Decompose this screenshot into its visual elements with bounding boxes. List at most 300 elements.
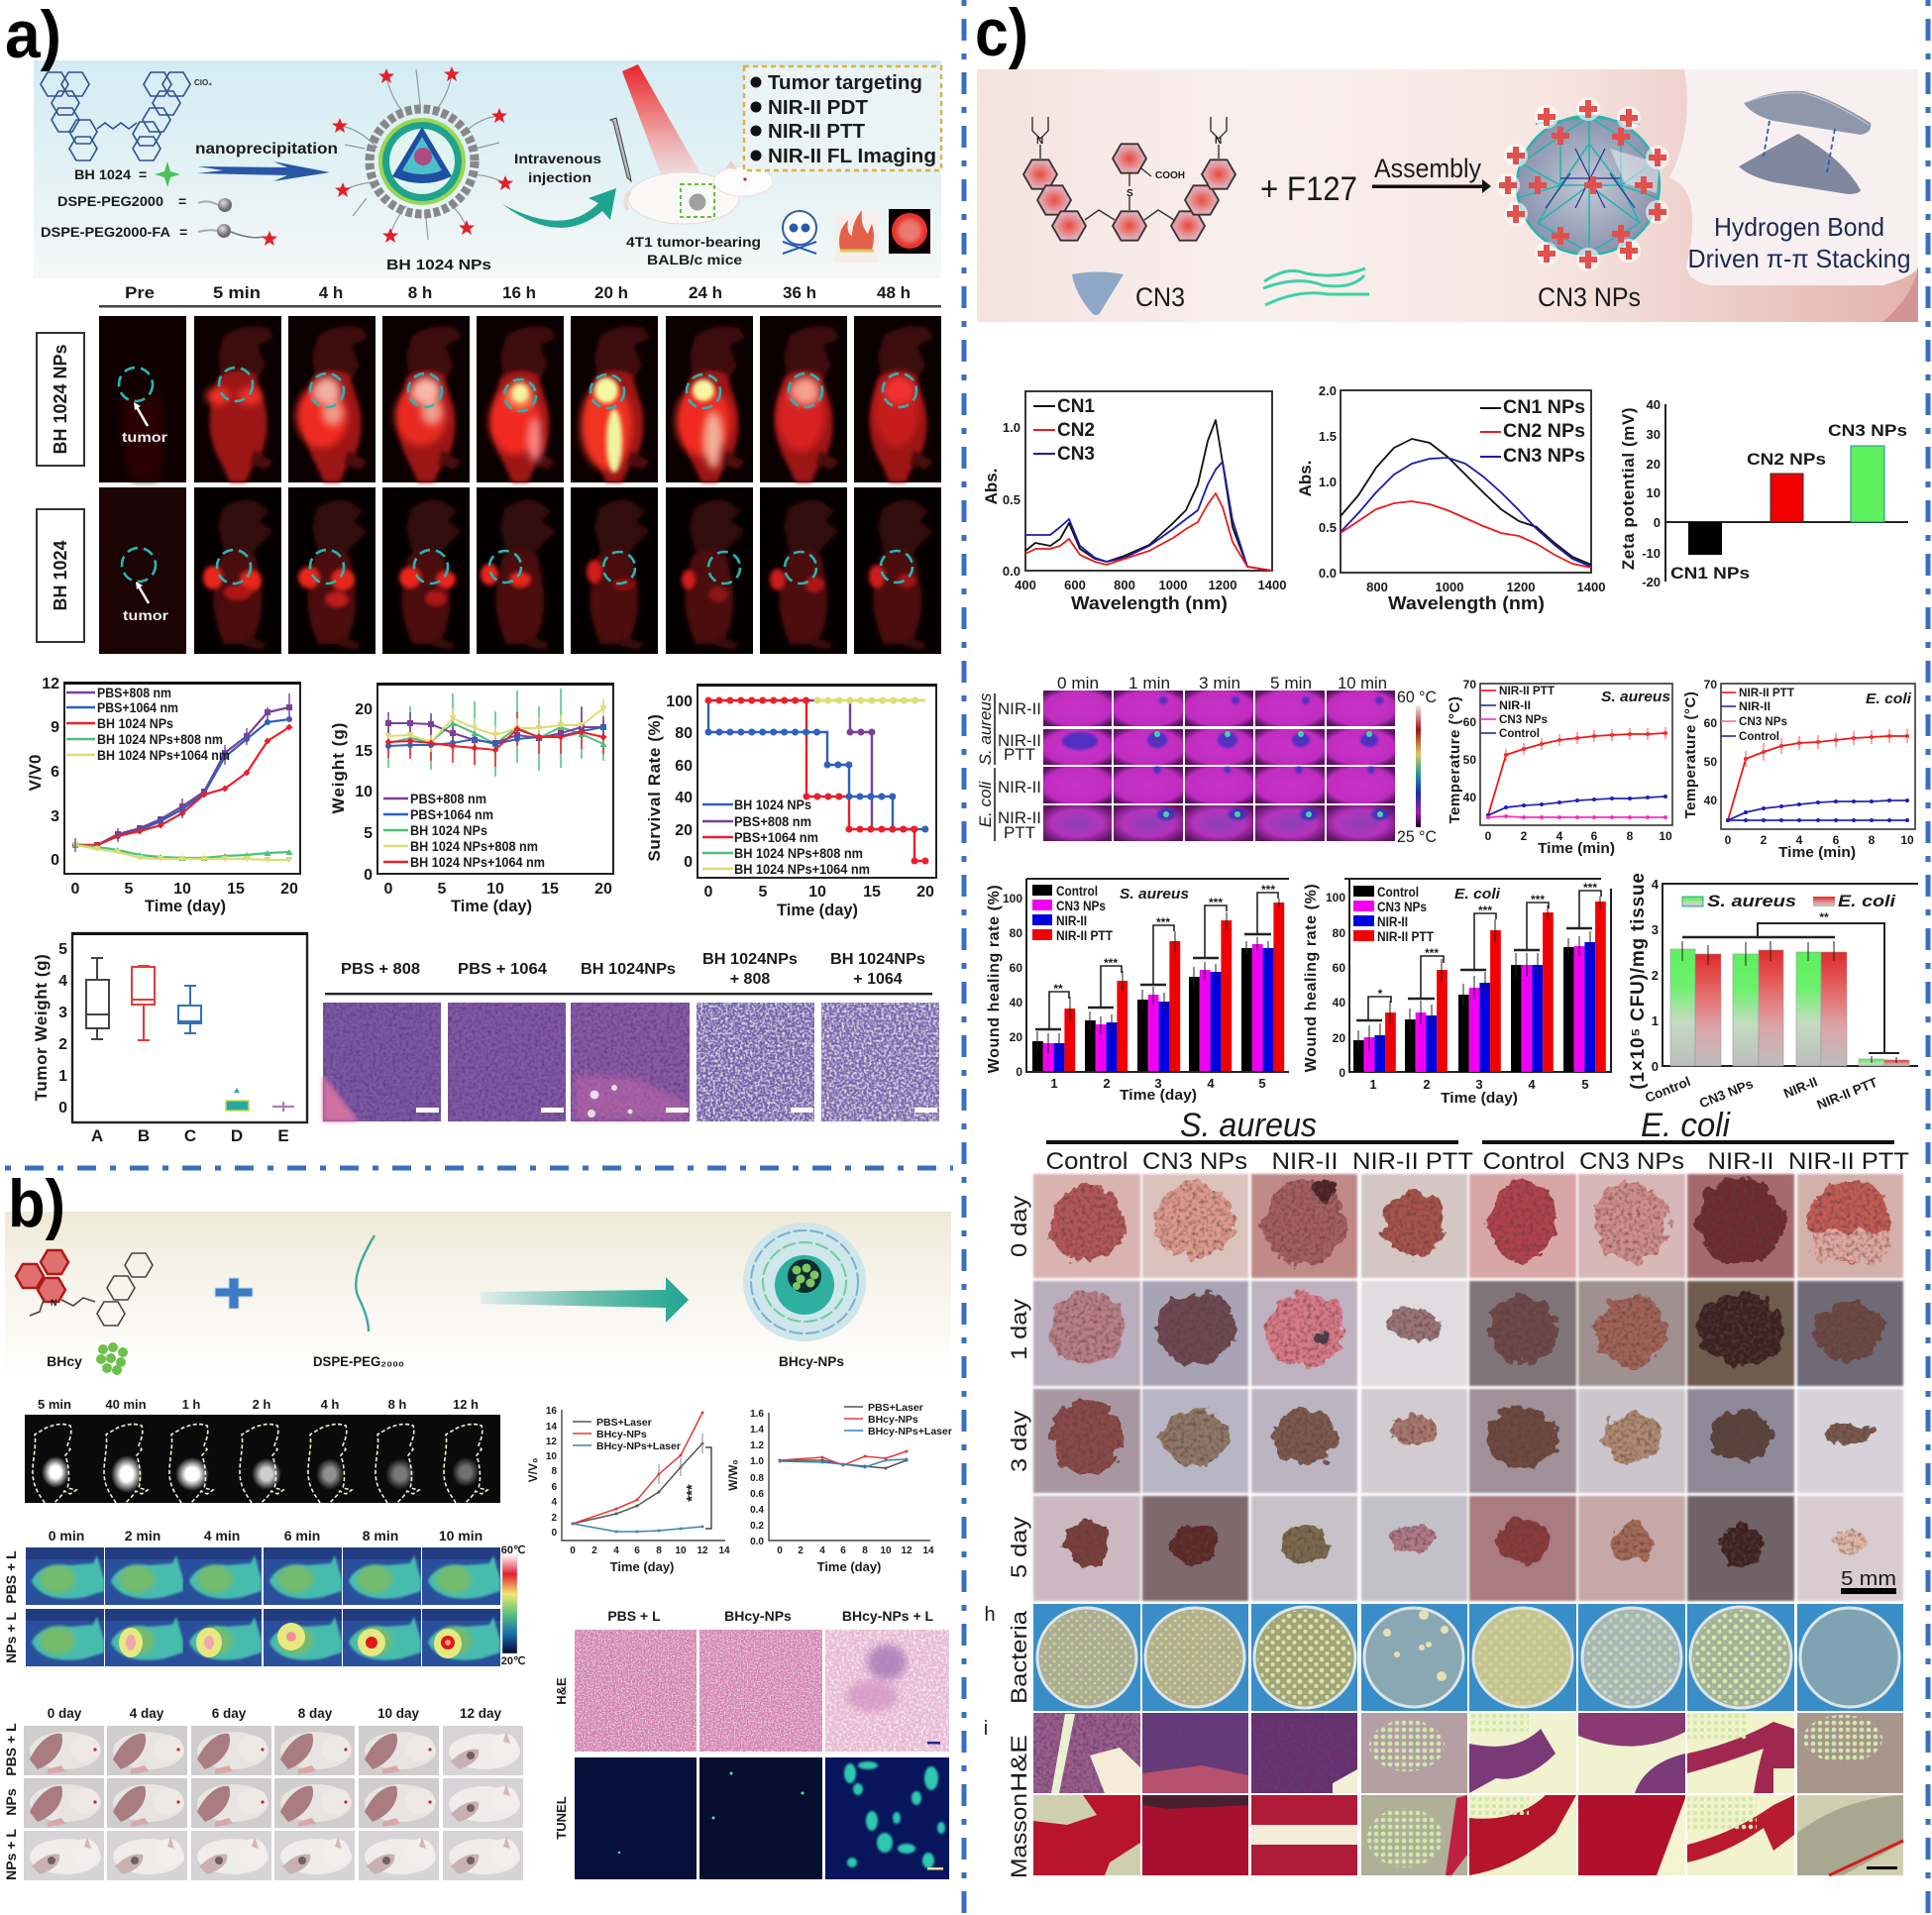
chart: wound healing S. aureus: *** — [1104, 956, 1118, 970]
legend: BH 1024 NPs — [410, 823, 487, 838]
chart: survival rate: 40 — [675, 790, 693, 806]
chart: wound healing S. aureus: *** — [1209, 896, 1223, 909]
chart: tumor weight box plot: 1 — [58, 1068, 67, 1085]
headers: wound photograph grid: CN3 NPs — [1142, 1148, 1247, 1175]
chart: survival rate: 80 — [675, 725, 693, 742]
chart: temperature S. aureus: 6 — [1591, 829, 1598, 843]
image: mouse photographs: 10 day — [377, 1706, 420, 1721]
legend: CN3 — [1057, 444, 1095, 465]
chart: absorbance CN NPs: Wavelength (nm) — [1388, 593, 1545, 613]
chart: temperature E. coli: 6 — [1833, 833, 1840, 847]
annotation: tumor arrow: tumor — [123, 607, 169, 623]
chart: temperature E. coli: 40 — [1704, 794, 1717, 807]
image: mouse photographs: NPs + L — [3, 1829, 19, 1880]
image: wound thermal imaging: 10 min — [1338, 674, 1387, 692]
legend: NIR-II — [1056, 913, 1087, 928]
image: mouse photographs: 6 day — [212, 1706, 247, 1721]
icon: laser beam — [622, 64, 705, 182]
image: H&E and TUNEL panel b — [554, 1608, 949, 1879]
chart: zeta potential: 20 — [1647, 457, 1661, 472]
icon: skull — [783, 211, 816, 254]
chart: V/V0 panel b: V/V₀ — [526, 1458, 540, 1482]
chart: bacterial burden: (1×10⁵ CFU)/mg tissue — [1628, 872, 1649, 1090]
callout: functions box — [744, 66, 941, 170]
labels: banner b — [47, 1353, 844, 1369]
image: thermal imaging: PBS + L — [3, 1550, 19, 1604]
chart: wound healing E. coli: Wound healing rate (%) — [1303, 884, 1320, 1072]
legend: components — [41, 161, 277, 246]
arrow: assembly — [481, 1277, 689, 1323]
chart: tumor weight box plot: 3 — [58, 1005, 67, 1021]
chart: W/W0 panel b: 1.6 — [750, 1409, 764, 1420]
molecule: CN3 — [1023, 144, 1235, 241]
chart: tumor weight box plot: B — [138, 1126, 150, 1145]
headers: wound photograph grid — [1046, 1107, 1909, 1175]
chart: absorbance CN1-3: Abs. — [982, 469, 1001, 504]
labels: thermal rows: NIR-II — [998, 731, 1041, 750]
chart: zeta potential: 10 — [1647, 485, 1661, 500]
chart: survival rate: Time (day) — [777, 901, 858, 919]
histology labels: panel a: PBS + 808 — [341, 961, 420, 978]
molecule: BH 1024 — [41, 72, 212, 160]
heading: b): b) — [8, 1166, 65, 1241]
legend: E. coli — [1838, 892, 1896, 910]
chart: wound healing S. aureus: Time (day) — [1120, 1087, 1197, 1104]
image: wound thermal imaging: 1 min — [1128, 674, 1170, 692]
banner: BH 1024 nanoparticle synthesis — [34, 60, 941, 278]
labels: banner b: BHcy-NPs — [779, 1353, 844, 1369]
chart: wound healing E. coli: * — [1378, 987, 1383, 1001]
label: Assembly: Assembly — [1374, 154, 1481, 183]
chart: absorbance CN1-3: 1200 — [1209, 578, 1236, 592]
legend: BHcy-NPs — [868, 1414, 918, 1426]
banner: BHcy nanoparticle synthesis — [5, 1212, 951, 1376]
labels: thermal rows: PTT — [1004, 823, 1035, 842]
legend: components: = — [139, 166, 147, 182]
chart: bacterial burden: 3 — [1652, 922, 1659, 937]
chart: wound healing S. aureus: 4 — [1207, 1076, 1215, 1091]
chart: body weight: 0 — [384, 881, 393, 898]
icon: CN3 nanoparticle — [1496, 97, 1669, 271]
headers: wound photograph grid: NIR-II PTT — [1352, 1148, 1473, 1175]
annotation: significance bracket — [1682, 910, 1899, 1053]
image: thermal imaging: 4 min — [204, 1528, 240, 1543]
chart: absorbance CN NPs: 800 — [1366, 580, 1388, 594]
chart: temperature E. coli: 60 — [1704, 716, 1717, 730]
chart: temperature S. aureus: 8 — [1627, 829, 1634, 843]
time-point labels: 8 h — [408, 283, 432, 302]
chart: W/W0 panel b: 2 — [798, 1545, 804, 1556]
chart: V/V0 tumor growth: 3 — [51, 808, 59, 825]
chart: W/W0 panel b: 10 — [880, 1545, 892, 1556]
chart: absorbance CN NPs: 0.5 — [1319, 520, 1337, 535]
histology labels: panel a: BH 1024NPs — [702, 951, 798, 968]
chart: absorbance CN NPs: 1.0 — [1319, 475, 1337, 489]
image grid: wound photographs day 1 — [1033, 1281, 1903, 1386]
time-point labels: 24 h — [689, 283, 722, 302]
callout: functions box: NIR-II PDT — [768, 97, 868, 119]
chart: survival rate: 20 — [916, 884, 934, 901]
label: BH 1024 row — [37, 509, 84, 642]
image: NIR-II fluorescence time series: 40 min — [105, 1397, 147, 1412]
legend: PBS+Laser — [596, 1417, 652, 1429]
legend: components: DSPE-PEG2000-FA — [41, 224, 170, 240]
legend — [573, 1417, 681, 1452]
chart: survival rate: 15 — [863, 884, 881, 901]
image grid: Masson staining — [1033, 1795, 1903, 1875]
chart: wound healing S. aureus: 2 — [1103, 1076, 1111, 1091]
labels: thermal rows: E. coli — [976, 781, 995, 827]
time-point labels: 20 h — [594, 283, 628, 302]
headers: wound photograph grid: NIR-II PTT — [1788, 1148, 1909, 1175]
image: wound thermal imaging — [976, 674, 1437, 846]
image: thermal imaging: 10 min — [439, 1528, 483, 1543]
labels: banner b: DSPE-PEG₂₀₀₀ — [313, 1353, 404, 1369]
icon: stacked triangles — [1739, 91, 1871, 194]
legend: NIR-II — [1739, 701, 1771, 713]
icon: DSPE-PEG chain — [356, 1235, 375, 1331]
chart: survival rate: 0 — [684, 854, 693, 871]
legend: NIR-II — [1499, 700, 1531, 712]
time-point labels: 5 min — [213, 283, 261, 302]
chart: temperature S. aureus: 60 — [1463, 715, 1476, 729]
label: stacking mechanism: Hydrogen Bond — [1714, 212, 1884, 242]
legend — [1480, 397, 1585, 467]
chart: temperature S. aureus: Temperature (°C) — [1447, 696, 1463, 823]
image: NIR-II fluorescence time series: 4 h — [321, 1397, 339, 1412]
chart: wound healing S. aureus: *** — [1261, 883, 1275, 897]
chart: zeta potential — [1619, 397, 1908, 589]
chart: temperature S. aureus: 2 — [1521, 829, 1528, 843]
arrow: assembly — [1372, 179, 1491, 193]
labels: thermal rows — [976, 692, 1041, 842]
row labels: wound photograph grid: H&E — [1007, 1735, 1031, 1792]
labels: thermal rows: NIR-II — [998, 808, 1041, 827]
chart: V/V0 panel b: 14 — [718, 1545, 730, 1556]
icon: BH 1024 nanoparticle — [332, 66, 513, 243]
label: mice: 4T1 tumor-bearing — [626, 234, 761, 250]
labels: thermal rows: PTT — [1004, 745, 1035, 764]
histology labels: panel a: + 808 — [730, 971, 770, 988]
legend: thermal colorbar: 60℃ — [501, 1544, 525, 1556]
label: intravenous injection — [514, 151, 601, 185]
chart: bacterial burden — [1628, 872, 1918, 1113]
chart: body weight — [329, 683, 613, 915]
legend: PBS+808 nm — [410, 792, 486, 806]
label: intravenous injection: injection — [528, 169, 591, 185]
chart: temperature S. aureus: 50 — [1463, 753, 1476, 767]
chart: absorbance CN1-3: 1000 — [1159, 578, 1187, 592]
label: + F127: + F127 — [1260, 170, 1357, 208]
label: mice: BALB/c mice — [647, 252, 742, 267]
scale bar — [1867, 1866, 1897, 1869]
chart: W/W0 panel b: 1.4 — [750, 1425, 764, 1436]
legend: components: BH 1024 — [74, 166, 131, 182]
chart: body weight: 15 — [541, 881, 559, 898]
legend: thermal colorbar: 60 °C — [1397, 688, 1437, 706]
chart: wound healing E. coli: 1 — [1369, 1077, 1377, 1092]
chart: wound healing S. aureus: 1 — [1050, 1076, 1058, 1091]
legend: Control — [1377, 885, 1419, 900]
image: thermal imaging: 8 min — [363, 1528, 398, 1543]
icon: red fluorescence spot — [889, 209, 930, 254]
label: stacking mechanism: Driven π-π Stacking — [1688, 244, 1910, 273]
chart: tumor weight box plot: 5 — [58, 941, 67, 958]
chart: body weight: 20 — [594, 881, 612, 898]
chart: temperature E. coli: Temperature (°C) — [1682, 692, 1699, 818]
chart: tumor weight box plot: C — [184, 1126, 196, 1145]
legend: CN2 NPs — [1503, 421, 1585, 442]
chart: bacterial burden: Control — [1643, 1074, 1692, 1106]
legend — [1353, 885, 1435, 944]
panel b — [3, 1166, 952, 1880]
chart: wound healing S. aureus: 0 — [1016, 1065, 1022, 1079]
annotation: tumor arrow: tumor — [122, 429, 168, 445]
chart: absorbance CN1-3: 1400 — [1258, 578, 1286, 592]
chart: temperature E. coli: 4 — [1796, 833, 1803, 847]
chart: bacterial burden: 0 — [1652, 1059, 1659, 1074]
image: mouse photographs: 12 day — [460, 1706, 502, 1721]
icon: flames — [835, 210, 879, 263]
chart: body weight: 5 — [438, 881, 447, 898]
legend: NIR-II PTT — [1056, 928, 1114, 943]
chart: temperature S. aureus — [1447, 678, 1672, 857]
chart: bacterial burden: 2 — [1652, 968, 1659, 983]
image: thermal imaging: 0 min — [49, 1528, 84, 1543]
label: CN3 NPs: CN3 NPs — [1538, 282, 1641, 312]
image: NIR-II fluorescence time series: 12 h — [453, 1397, 479, 1412]
legend: PBS+1064 nm — [97, 700, 178, 715]
legend: Control — [1739, 731, 1779, 743]
image: H&E and TUNEL panel b: H&E — [554, 1677, 569, 1705]
chart: absorbance CN1-3: 0.0 — [1003, 564, 1020, 579]
icon: syringe — [610, 118, 631, 181]
chart: W/W0 panel b: 12 — [901, 1545, 912, 1556]
chart: tumor weight box plot — [32, 932, 307, 1145]
chart: W/W0 panel b — [726, 1402, 952, 1574]
molecule: BHcy: N — [51, 1298, 57, 1308]
chart: survival rate: Survival Rate (%) — [645, 713, 664, 862]
chart: V/V0 panel b: 4 — [613, 1545, 619, 1556]
headers: wound photograph grid: NIR-II — [1272, 1148, 1338, 1175]
chart: V/V0 panel b: 16 — [546, 1406, 557, 1417]
legend: CN2 — [1057, 420, 1095, 441]
chart: survival rate — [645, 684, 936, 919]
histology labels: panel a: BH 1024NPs — [830, 951, 925, 968]
markers: tumor circles — [119, 368, 916, 411]
chart: wound healing S. aureus: 60 — [1010, 961, 1022, 975]
chart: zeta potential: 40 — [1647, 397, 1661, 412]
time-point labels: 16 h — [502, 283, 536, 302]
chart: V/V0 tumor growth: V/V0 — [26, 755, 45, 791]
legend: PBS+808 nm — [97, 686, 171, 700]
icon: dye cluster — [96, 1342, 128, 1375]
chart: tumor weight box plot: E — [277, 1126, 289, 1145]
image: mouse photographs: PBS + L — [3, 1723, 19, 1776]
annotation: significance bracket: *** — [684, 1484, 700, 1502]
legend — [1721, 688, 1794, 743]
molecule: BHcy — [16, 1250, 153, 1326]
markers: tumor circles — [122, 548, 912, 584]
image: H&E and TUNEL panel b: TUNEL — [554, 1796, 569, 1840]
headers: wound photograph grid: NIR-II — [1708, 1148, 1773, 1175]
chart: wound healing E. coli: *** — [1583, 881, 1597, 895]
chart: body weight: 5 — [364, 825, 373, 842]
chart: bacterial burden: 1 — [1652, 1013, 1659, 1028]
image row: BH 1024 fluorescence — [99, 487, 941, 654]
chart: V/V0 panel b — [526, 1406, 730, 1574]
legend: PBS+Laser — [868, 1402, 923, 1414]
chart: temperature E. coli: 10 — [1900, 833, 1914, 847]
image: NIR-II fluorescence time series — [25, 1397, 500, 1503]
chart: temperature E. coli: 50 — [1704, 755, 1717, 769]
row labels: wound photograph grid: Bacteria — [1007, 1610, 1031, 1704]
chart: wound healing S. aureus: S. aureus — [1120, 886, 1189, 903]
chart: wound healing S. aureus: Wound healing rate (%) — [986, 885, 1003, 1073]
chart: absorbance CN1-3: 1.0 — [1003, 420, 1020, 435]
chart: V/V0 panel b: 6 — [634, 1545, 640, 1556]
row labels: wound photograph grid: h — [984, 1604, 996, 1626]
image: thermal imaging: 6 min — [284, 1528, 320, 1543]
chart: bacterial burden: CN3 NPs — [1697, 1076, 1756, 1111]
chart: survival rate: 10 — [808, 884, 826, 901]
chart: body weight: 0 — [364, 867, 373, 884]
icon: mouse — [625, 160, 773, 224]
image grid: bacterial culture plates — [1033, 1604, 1903, 1711]
chart: tumor weight box plot: 0 — [58, 1100, 67, 1117]
panel a — [5, 0, 941, 1145]
icon: F127 chains — [1263, 268, 1369, 305]
chart: bacterial burden: NIR-II PTT — [1815, 1075, 1880, 1113]
chart: temperature S. aureus: 0 — [1485, 829, 1492, 843]
chart: temperature S. aureus: 4 — [1556, 829, 1563, 843]
headers: wound photograph grid: Control — [1482, 1148, 1565, 1175]
time-point labels: 36 h — [783, 283, 816, 302]
annotation: significance brackets — [1035, 893, 1278, 1029]
legend: components: = — [178, 193, 186, 209]
chart: W/W0 panel b: 6 — [840, 1545, 846, 1556]
chart: V/V0 panel b: 10 — [675, 1545, 687, 1556]
chart: W/W0 panel b: 8 — [862, 1545, 868, 1556]
legend: CN1 — [1057, 396, 1095, 417]
chart: wound healing E. coli: 2 — [1423, 1077, 1431, 1092]
chart: absorbance CN NPs: 2.0 — [1319, 383, 1337, 398]
chart: W/W0 panel b: 0 — [777, 1545, 783, 1556]
chart: absorbance CN1-3: 400 — [1015, 578, 1036, 592]
label: BH 1024 NPs row — [37, 333, 84, 466]
arrow: injection — [502, 188, 616, 228]
label: BH 1024 row: BH 1024 — [51, 540, 70, 611]
chart: V/V0 tumor growth: 0 — [51, 852, 59, 869]
image: thermal imaging — [3, 1528, 525, 1667]
legend: PBS+808 nm — [734, 814, 811, 829]
icon: plus — [215, 1278, 253, 1309]
chart: temperature E. coli: E. coli — [1866, 691, 1912, 707]
legend: BH 1024 NPs+1064 nm — [734, 862, 870, 877]
chart: temperature E. coli: 2 — [1761, 833, 1768, 847]
legend: Control — [1499, 728, 1540, 740]
molecule: BH 1024: ClO₄ — [194, 78, 212, 87]
chart: V/V0 panel b: 6 — [551, 1482, 557, 1493]
chart: body weight: Time (day) — [451, 897, 532, 915]
legend — [844, 1402, 952, 1437]
chart: body weight: 20 — [355, 701, 373, 718]
label: BH 1024 NPs row: BH 1024 NPs — [51, 344, 70, 455]
chart: absorbance CN1-3 — [982, 391, 1286, 613]
legend — [383, 792, 545, 870]
legend: NIR-II — [1377, 914, 1408, 929]
time-point labels: Pre — [125, 283, 155, 302]
chart: body weight: 15 — [355, 743, 373, 760]
chart: temperature S. aureus: 70 — [1463, 678, 1476, 692]
headers: wound photograph grid: CN3 NPs — [1579, 1148, 1684, 1175]
legend: thermal colorbar: 20℃ — [501, 1655, 525, 1667]
row labels: wound photograph grid: Masson — [1007, 1793, 1031, 1878]
legend: PBS+1064 nm — [734, 830, 818, 845]
chart: V/V0 tumor growth: 0 — [71, 881, 80, 898]
banner: CN3 assembly: S — [1127, 188, 1133, 199]
legend: components: = — [179, 224, 187, 240]
callout: functions box: Tumor targeting — [768, 72, 922, 94]
legend: PBS+1064 nm — [410, 807, 493, 822]
chart: absorbance CN NPs — [1296, 383, 1605, 613]
legend — [702, 798, 870, 877]
row labels: wound photograph grid: 3 day — [1007, 1411, 1031, 1472]
legend: BH 1024 NPs+808 nm — [97, 732, 223, 747]
chart: V/V0 tumor growth: Time (day) — [145, 897, 226, 915]
chart: V/V0 tumor growth — [26, 676, 300, 915]
labels: thermal rows: S. aureus — [976, 692, 995, 765]
legend: Control — [1056, 884, 1098, 899]
chart: tumor weight box plot: Tumor Weight (g) — [32, 954, 51, 1101]
image grid: wound photographs day 5 — [1033, 1496, 1903, 1601]
chart: V/V0 tumor growth: 10 — [173, 881, 191, 898]
annotation: significance bracket — [684, 1447, 711, 1529]
legend: S. aureus — [1707, 892, 1796, 910]
image: H&E and TUNEL panel b: BHcy-NPs — [724, 1608, 792, 1624]
chart: survival rate: 100 — [666, 693, 693, 710]
chart: wound healing E. coli: 0 — [1339, 1066, 1345, 1080]
annotation: tumor arrow — [122, 402, 168, 445]
chart: V/V0 panel b: 8 — [656, 1545, 662, 1556]
histology labels: panel a: BH 1024NPs — [581, 961, 676, 978]
chart: absorbance CN NPs: Abs. — [1296, 461, 1315, 496]
legend: NIR-II PTT — [1499, 686, 1555, 697]
chart: wound healing S. aureus: 3 — [1154, 1076, 1162, 1091]
legend: BHcy-NPs+Laser — [596, 1440, 681, 1452]
time-point labels — [125, 283, 911, 302]
chart: absorbance CN NPs: 1.5 — [1319, 429, 1337, 444]
chart: absorbance CN1-3: 800 — [1114, 578, 1135, 592]
banner: CN3 assembly: COOH — [1155, 170, 1185, 181]
image grid: wound photographs day 3 — [1033, 1389, 1903, 1493]
chart: zeta potential: -10 — [1642, 546, 1661, 561]
image: H&E and TUNEL panel b: PBS + L — [607, 1608, 661, 1624]
chart: temperature S. aureus: Time (min) — [1538, 840, 1615, 857]
chart: wound healing E. coli: 100 — [1326, 891, 1345, 904]
chart: wound healing E. coli: 80 — [1333, 926, 1345, 940]
legend: NIR-II PTT — [1739, 688, 1794, 699]
chart: zeta potential: 30 — [1647, 427, 1661, 442]
chart: V/V0 panel b: 14 — [546, 1422, 557, 1433]
legend: components: DSPE-PEG2000 — [57, 193, 163, 209]
chart: temperature E. coli: 8 — [1869, 833, 1876, 847]
headers: wound photograph grid: S. aureus — [1180, 1107, 1317, 1144]
chart: V/V0 tumor growth: 5 — [125, 881, 134, 898]
chart: wound healing E. coli: *** — [1531, 893, 1545, 906]
image: thermal imaging: 2 min — [125, 1528, 161, 1543]
image: mouse photographs: 0 day — [48, 1706, 82, 1721]
